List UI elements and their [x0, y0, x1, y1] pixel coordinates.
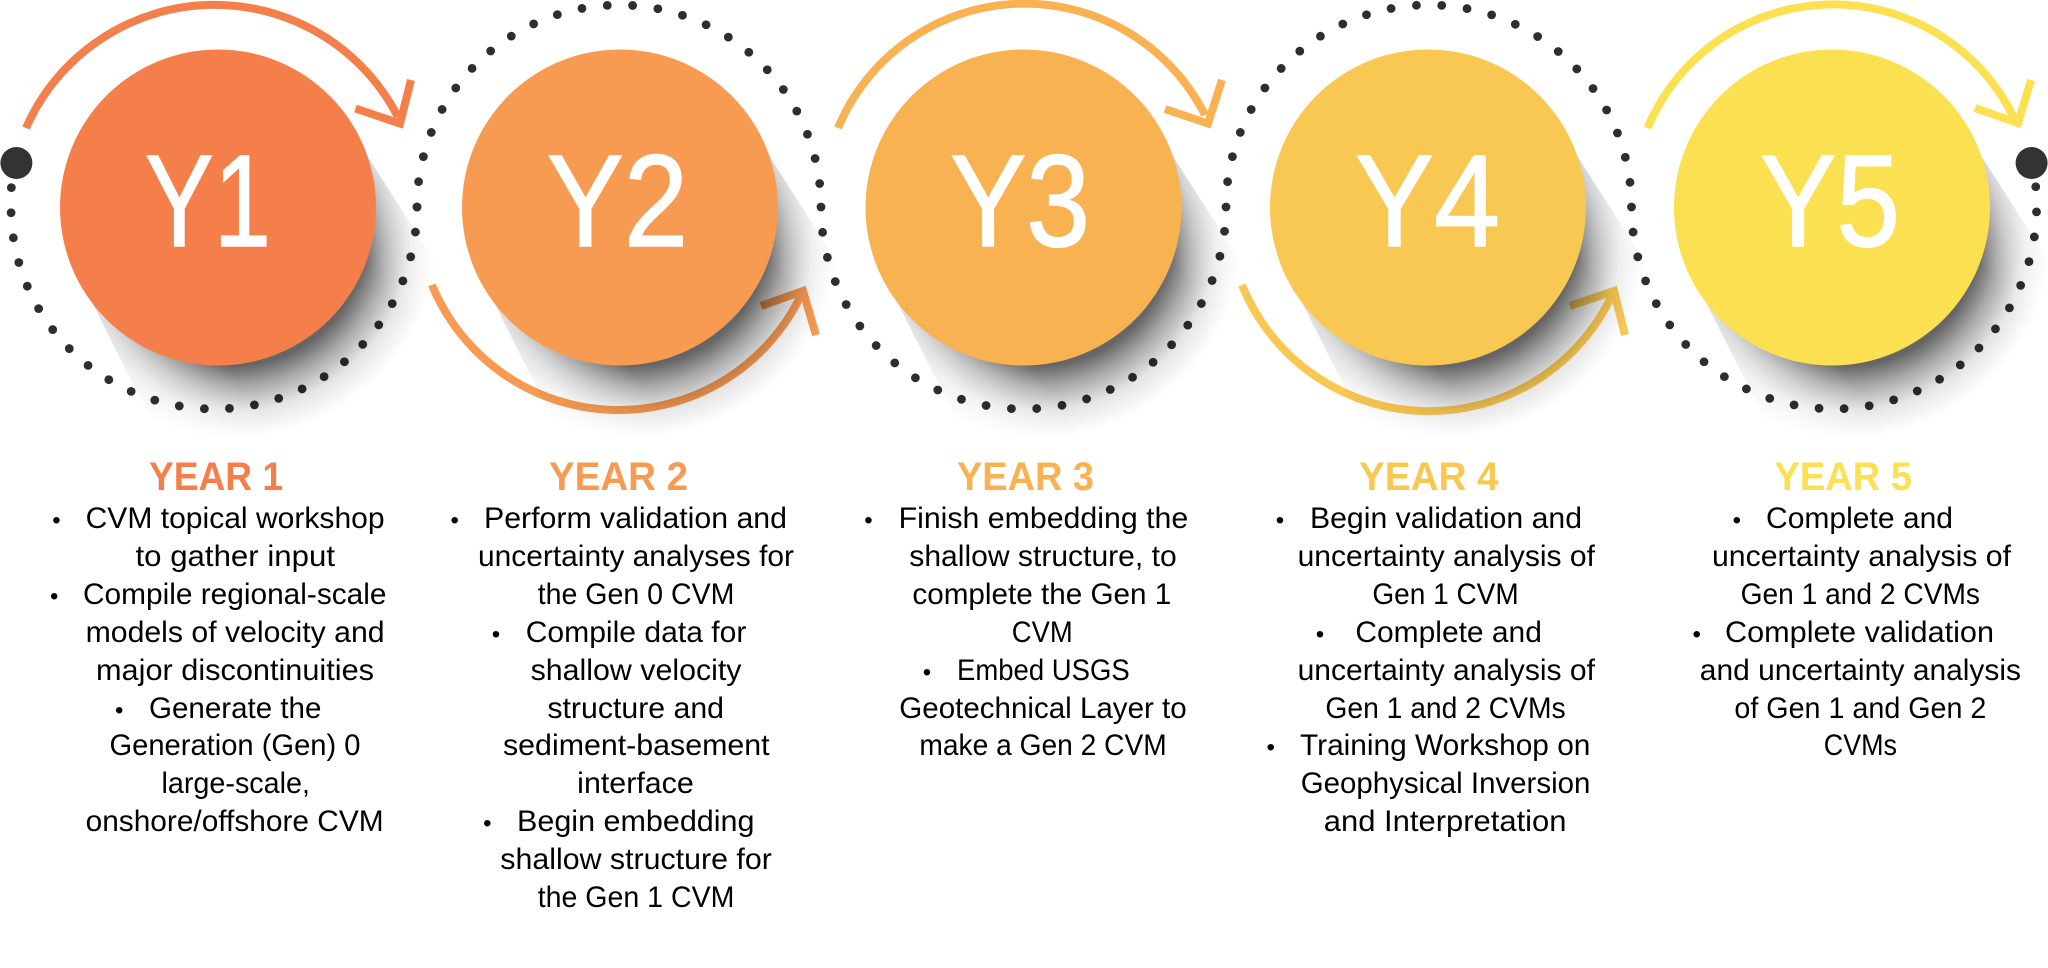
text block: year 1 items: large-scale,	[162, 767, 310, 800]
text block: year 4 items: •	[1266, 734, 1275, 761]
text block: year 3 items: CVM	[1012, 616, 1073, 649]
text block: year 3 items: complete the Gen 1	[912, 578, 1171, 611]
circle: Y2: Y2	[547, 127, 688, 274]
arrow: year 1 upper arc	[26, 5, 411, 128]
text block: year 2 items: •	[492, 621, 500, 648]
text block: year 1 items: CVM topical workshop	[86, 502, 385, 535]
arrow: year 3 upper arc	[838, 4, 1222, 128]
text block: year 1 items	[50, 502, 386, 838]
arrow: year 4 lower arc	[1242, 285, 1625, 411]
arrow: year 2 lower arc	[432, 285, 816, 410]
text block: year 5 items: •	[1692, 621, 1701, 648]
heading: year 4: YEAR 4	[1359, 455, 1499, 499]
text block: year 2 items: the Gen 1 CVM	[538, 881, 734, 914]
text block: year 3 items: •	[864, 507, 873, 534]
panel: year 5	[1692, 455, 2021, 762]
text block: year 1 items: to gather input	[136, 540, 336, 573]
circle: Y2	[462, 50, 778, 366]
heading: year 1: YEAR 1	[149, 455, 283, 499]
text block: year 2 items: interface	[577, 767, 694, 800]
text block: year 5 items: and uncertainty analysis	[1700, 654, 2021, 687]
text block: year 2 items: shallow structure for	[500, 843, 772, 876]
text block: year 4 items: Begin validation and	[1310, 502, 1582, 535]
text block: year 2 items: •	[450, 507, 459, 534]
heading: year 3: YEAR 3	[957, 455, 1094, 499]
circle: Y3: Y3	[950, 127, 1090, 274]
heading: year 2: YEAR 2	[549, 455, 688, 499]
start marker dot	[0, 147, 32, 179]
text block: year 4 items: Gen 1 CVM	[1372, 578, 1519, 611]
text block: year 5 items: •	[1733, 507, 1741, 534]
text block: year 1 items: Generate the	[149, 692, 321, 725]
text block: year 5 items: CVMs	[1824, 729, 1897, 762]
circle: Y1	[60, 50, 376, 366]
dotted timeline path	[11, 5, 2037, 409]
circle shadows	[93, 156, 2035, 427]
text block: year 2 items	[450, 502, 794, 914]
text block: year 3 items: shallow structure, to	[909, 540, 1177, 573]
text block: year 4 items	[1266, 502, 1596, 838]
text block: year 2 items: Begin embedding	[517, 805, 754, 838]
panel: year 2	[450, 455, 794, 914]
text block: year 4 items: uncertainty analysis of	[1298, 654, 1596, 687]
end marker dot	[2016, 147, 2048, 179]
text block: year 1 items: major discontinuities	[96, 654, 374, 687]
text block: year 4 items: •	[1316, 621, 1324, 648]
panel: year 1	[50, 455, 386, 838]
circle: Y1: Y1	[145, 127, 271, 274]
text block: year 3 items: Finish embedding the	[899, 502, 1188, 535]
text block: year 2 items: uncertainty analyses for	[478, 540, 794, 573]
circle: Y5	[1674, 50, 1990, 366]
text block: year 2 items: sediment-basement	[503, 729, 770, 762]
text block: year 3 items	[864, 502, 1188, 762]
heading: year 5: YEAR 5	[1774, 455, 1912, 499]
circle: Y3	[866, 50, 1182, 366]
text block: year 1 items: •	[50, 583, 58, 610]
arrow: year 5 upper arc	[1648, 4, 2031, 128]
text block: year 1 items: onshore/offshore CVM	[86, 805, 384, 838]
text block: year 4 items: Complete and	[1355, 616, 1542, 649]
text block: year 1 items: •	[115, 697, 123, 724]
text block: year 2 items: the Gen 0 CVM	[538, 578, 734, 611]
circle: Y4: Y4	[1355, 127, 1500, 274]
text block: year 1 items: Compile regional-scale	[83, 578, 386, 611]
text block: year 5 items: Complete validation	[1725, 616, 1994, 649]
text block: year 1 items: Generation (Gen) 0	[110, 729, 360, 762]
circle: Y4	[1270, 50, 1586, 366]
text block: year 1 items: models of velocity and	[86, 616, 385, 649]
text block: year 3 items: •	[923, 659, 931, 686]
text block: year 5 items: Complete and	[1766, 502, 1953, 535]
text block: year 3 items: make a Gen 2 CVM	[919, 729, 1167, 762]
text block: year 4 items: Geophysical Inversion	[1301, 767, 1590, 800]
text block: year 4 items: uncertainty analysis of	[1298, 540, 1596, 573]
text block: year 2 items: structure and	[547, 692, 724, 725]
text block: year 2 items: •	[483, 810, 492, 837]
text block: year 1 items: •	[52, 507, 61, 534]
text block: year 5 items: Gen 1 and 2 CVMs	[1741, 578, 1980, 611]
text block: year 4 items: •	[1276, 507, 1284, 534]
text block: year 3 items: Geotechnical Layer to	[899, 692, 1187, 725]
text block: year 2 items: Perform validation and	[484, 502, 787, 535]
text block: year 4 items: Training Workshop on	[1300, 729, 1590, 762]
text block: year 4 items: Gen 1 and 2 CVMs	[1325, 692, 1566, 725]
text block: year 5 items	[1692, 502, 2021, 762]
panel: year 3	[864, 455, 1188, 762]
text block: year 3 items: Embed USGS	[957, 654, 1130, 687]
text block: year 2 items: Compile data for	[526, 616, 746, 649]
text block: year 5 items: uncertainty analysis of	[1712, 540, 2012, 573]
circle: Y5: Y5	[1760, 127, 1900, 274]
text block: year 4 items: and Interpretation	[1324, 805, 1566, 838]
text block: year 2 items: shallow velocity	[531, 654, 742, 687]
panel: year 4	[1266, 455, 1596, 838]
text block: year 5 items: of Gen 1 and Gen 2	[1734, 692, 1986, 725]
